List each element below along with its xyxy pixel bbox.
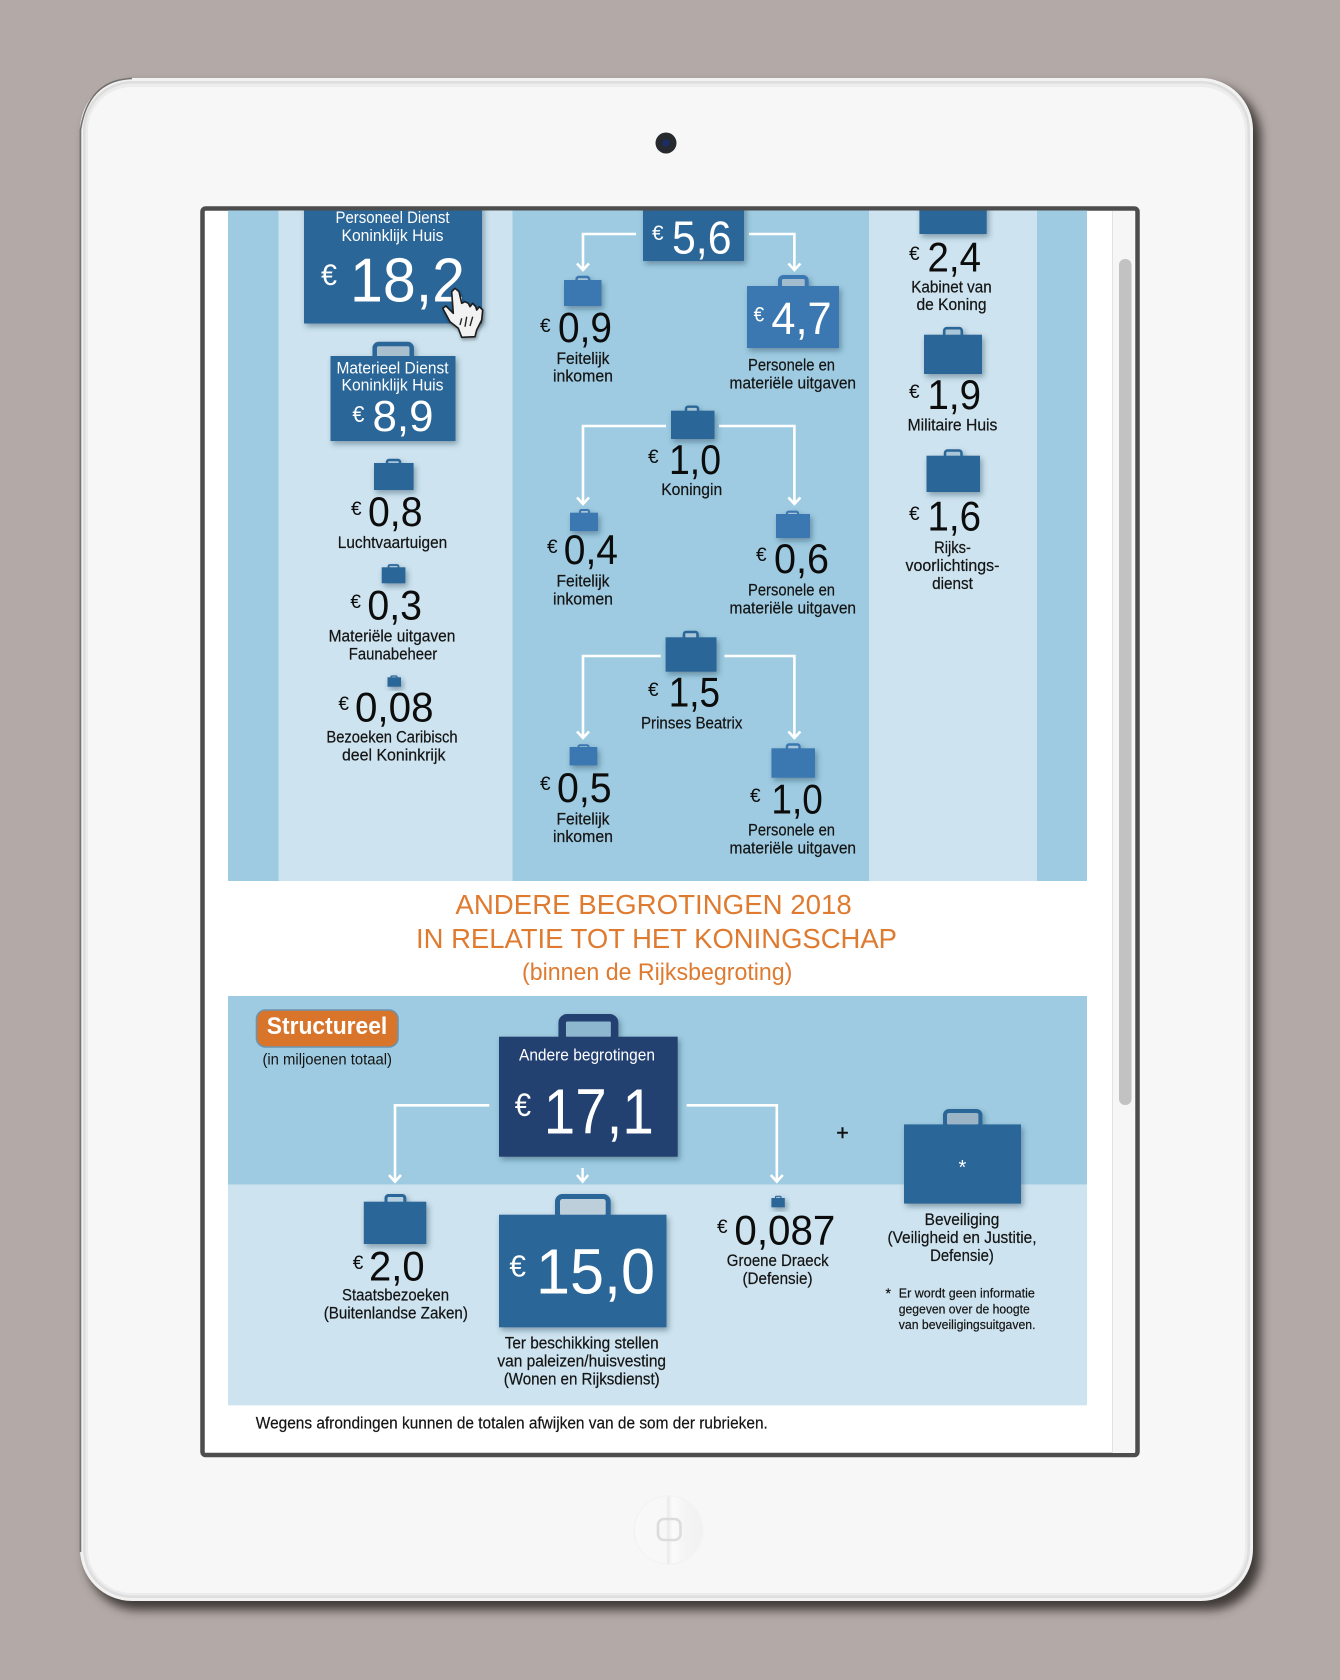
bag: paleizen huisvesting 15,0	[497, 1196, 666, 1388]
bag: Andere begrotingen 17,1: Andere begrotingen	[519, 1046, 655, 1065]
bag: Beveiliging: (Veiligheid en Justitie,	[888, 1228, 1036, 1247]
item: Koningin feitelijk inkomen 0,4: €	[547, 537, 558, 558]
item: Materiele uitgaven Faunabeheer 0,3: €	[350, 592, 361, 613]
item: Staatsbezoeken 2,0: (Buitenlandse Zaken)	[324, 1303, 468, 1322]
bag: Materieel Dienst 8,9: €	[352, 401, 365, 427]
item: Rijksvoorlichtingsdienst 1,6: 1,6	[928, 493, 981, 540]
panel: column background upper	[228, 205, 1087, 881]
item: Bezoeken Caribisch deel Koninkrijk 0,08: deel Koninkrijk	[342, 746, 446, 765]
text: footnote: gegeven over de hoogte	[899, 1302, 1030, 1316]
item: Koningin feitelijk inkomen 0,4: 0,4	[564, 526, 618, 573]
item: Materiele uitgaven Faunabeheer 0,3: 0,3	[367, 582, 422, 629]
bag: Beveiliging: *	[959, 1157, 967, 1179]
item: Koning personele en materiele uitgaven 4,7: 4,7	[771, 293, 832, 344]
item: Koningin personele en materiele uitgaven 0,6: materiële uitgaven	[730, 598, 856, 617]
item: Koning feitelijk inkomen 0,9: €	[540, 316, 551, 337]
arrow: Koningin to uitgaven	[719, 426, 800, 504]
item: Koningin personele en materiele uitgaven 0,6: €	[756, 545, 767, 566]
item: Prinses Beatrix 1,5	[641, 632, 743, 732]
item: Militaire Huis 1,9	[908, 328, 997, 435]
bag: Materieel Dienst 8,9	[330, 344, 456, 441]
title: (binnen de Rijksbegroting)	[522, 959, 792, 986]
panel: Koninklijk Huis column	[304, 190, 483, 765]
bag: Koning 5,6	[642, 210, 750, 268]
item: Koningin personele en materiele uitgaven 0,6: 0,6	[774, 535, 829, 582]
bag: paleizen huisvesting 15,0: Ter beschikking stellen	[505, 1333, 659, 1352]
arrow: Koning to inkomen	[577, 234, 636, 270]
bag: paleizen huisvesting 15,0: van paleizen/huisvesting	[497, 1351, 666, 1370]
item: Rijksvoorlichtingsdienst 1,6: dienst	[932, 574, 973, 593]
item: Groene Draeck 0,087: €	[717, 1217, 728, 1238]
arrow: to Groene Draeck	[687, 1105, 783, 1182]
arrow: Prinses Beatrix to uitgaven	[724, 656, 800, 738]
bag: Koning 5,6: €	[652, 222, 664, 245]
item: Koning personele en materiele uitgaven 4,7: materiële uitgaven	[730, 373, 856, 392]
icon: hand cursor	[443, 288, 483, 337]
item: Staatsbezoeken 2,0: €	[353, 1253, 364, 1274]
arrow: to Staatsbezoeken	[389, 1105, 489, 1182]
bag: paleizen huisvesting 15,0: 15,0	[536, 1235, 655, 1307]
item: Koning feitelijk inkomen 0,9	[540, 277, 613, 386]
text: footnote: Er wordt geen informatie	[899, 1286, 1035, 1300]
item: Kabinet van de Koning 2,4: Kabinet van	[911, 277, 992, 296]
badge: Structureel: Structureel	[267, 1013, 387, 1040]
item: Koningin feitelijk inkomen 0,4: inkomen	[553, 589, 613, 608]
title	[416, 889, 897, 986]
item: Prinses Beatrix 1,5: Prinses Beatrix	[641, 713, 743, 732]
text: footnote	[886, 1285, 1036, 1332]
item: Materiele uitgaven Faunabeheer 0,3: Materiële uitgaven	[329, 627, 455, 646]
item: Koningin personele en materiele uitgaven 0,6	[730, 512, 856, 617]
item: Kabinet van de Koning 2,4: €	[909, 244, 920, 265]
item: Koningin 1,0	[648, 407, 722, 499]
bag: paleizen huisvesting 15,0: (Wonen en Rijksdienst)	[504, 1369, 660, 1388]
item: Bezoeken Caribisch deel Koninkrijk 0,08: €	[338, 694, 349, 715]
badge: Structureel	[256, 1010, 398, 1047]
arrow: Prinses Beatrix to inkomen	[577, 656, 661, 738]
text: footnote: van beveiligingsuitgaven.	[899, 1317, 1036, 1332]
item: Luchtvaartuigen 0,8: 0,8	[368, 488, 422, 535]
item: Groene Draeck 0,087	[717, 1196, 835, 1288]
item: Bezoeken Caribisch deel Koninkrijk 0,08: Bezoeken Caribisch	[326, 728, 458, 747]
title: IN RELATIE TOT HET KONINGSCHAP	[416, 923, 897, 954]
item: Bezoeken Caribisch deel Koninkrijk 0,08	[326, 676, 458, 765]
item: Staatsbezoeken 2,0	[324, 1196, 468, 1322]
text: plus: +	[836, 1122, 849, 1145]
item: Luchtvaartuigen 0,8: €	[351, 499, 362, 520]
bag: Beveiliging: Defensie)	[930, 1246, 994, 1265]
item: Bezoeken Caribisch deel Koninkrijk 0,08: 0,08	[355, 683, 434, 730]
bag: Andere begrotingen 17,1: 17,1	[544, 1075, 654, 1147]
text: rounding note: Wegens afrondingen kunnen de totalen afwijken van de som der rubrieken.	[256, 1414, 768, 1432]
item: Prinses Beatrix 1,5: 1,5	[669, 668, 720, 716]
icon: home button	[634, 1495, 704, 1565]
bag: paleizen huisvesting 15,0: €	[509, 1249, 526, 1284]
item: Koning personele en materiele uitgaven 4,7: Personele en	[748, 355, 835, 374]
scrollbar	[1119, 259, 1132, 1105]
bag: Beveiliging: Beveiliging	[925, 1210, 999, 1229]
item: Beatrix personele en materiele uitgaven 1,0: Personele en	[748, 820, 835, 839]
item: Luchtvaartuigen 0,8: Luchtvaartuigen	[338, 533, 447, 552]
arrow: Koning to uitgaven	[749, 234, 800, 270]
item: Militaire Huis 1,9: 1,9	[928, 371, 981, 418]
bag: Koning 5,6: Koning	[666, 191, 718, 210]
item: Groene Draeck 0,087: 0,087	[734, 1207, 835, 1254]
item: Koning personele en materiele uitgaven 4,7	[730, 277, 856, 392]
item: Rijksvoorlichtingsdienst 1,6: Rijks-	[934, 538, 971, 557]
item: Beatrix personele en materiele uitgaven 1,0: materiële uitgaven	[730, 838, 856, 857]
item: Kabinet van de Koning 2,4	[909, 210, 992, 314]
item: Koningin 1,0: 1,0	[669, 436, 721, 483]
item: Koningin 1,0: Koningin	[661, 480, 722, 499]
item: Koningin feitelijk inkomen 0,4	[547, 510, 618, 608]
screen frame	[202, 208, 1138, 1455]
item: Beatrix personele en materiele uitgaven 1,0	[730, 744, 856, 857]
item: Beatrix feitelijk inkomen 0,5: inkomen	[553, 827, 613, 846]
screen content	[228, 190, 1087, 1432]
title: ANDERE BEGROTINGEN 2018	[455, 889, 852, 920]
item: Beatrix feitelijk inkomen 0,5	[540, 745, 613, 846]
item: Rijksvoorlichtingsdienst 1,6: voorlichtings-	[906, 556, 999, 575]
item: Koning personele en materiele uitgaven 4,7: €	[754, 304, 764, 327]
item: Beatrix personele en materiele uitgaven 1,0: €	[750, 786, 761, 807]
item: Prinses Beatrix 1,5: €	[648, 680, 659, 701]
icon: camera	[656, 132, 676, 154]
text: in miljoenen totaal: (in miljoenen totaal)	[262, 1052, 392, 1068]
arrow: to paleizen	[577, 1168, 588, 1182]
bag: Personeel Dienst 18,2: Personeel Dienst	[336, 208, 450, 227]
bag: Koning 5,6: 5,6	[672, 211, 732, 263]
item: Groene Draeck 0,087: Groene Draeck	[727, 1251, 829, 1270]
panel: right column	[906, 190, 999, 593]
item: Koningin personele en materiele uitgaven 0,6: Personele en	[748, 581, 835, 600]
item: Beatrix feitelijk inkomen 0,5: €	[540, 774, 551, 795]
text: footnote: *	[886, 1285, 892, 1301]
item: Militaire Huis 1,9: Militaire Huis	[908, 416, 997, 435]
item: Koning feitelijk inkomen 0,9: inkomen	[553, 367, 613, 386]
item: Rijksvoorlichtingsdienst 1,6	[906, 450, 999, 593]
item: Materiele uitgaven Faunabeheer 0,3	[329, 565, 455, 663]
item: Koningin 1,0: €	[648, 447, 659, 468]
bag: Personeel Dienst 18,2	[304, 190, 482, 324]
item: Koning feitelijk inkomen 0,9: Feitelijk	[556, 349, 610, 368]
bag: Personeel Dienst 18,2: €	[321, 259, 337, 292]
arrow: Koningin to inkomen	[577, 426, 666, 504]
item: Rijksvoorlichtingsdienst 1,6: €	[909, 504, 920, 525]
item: Staatsbezoeken 2,0: Staatsbezoeken	[342, 1285, 449, 1304]
bag: Beveiliging	[888, 1111, 1036, 1265]
panel: andere begrotingen	[228, 996, 1087, 1405]
bag: Materieel Dienst 8,9: Koninklijk Huis	[342, 376, 444, 394]
item: Kabinet van de Koning 2,4: de Koning	[916, 295, 986, 314]
item: Kabinet van de Koning 2,4: 2,4	[928, 234, 981, 281]
panel: Koning tree	[540, 190, 856, 857]
bag: Personeel Dienst 18,2: Koninklijk Huis	[342, 226, 444, 245]
item: Luchtvaartuigen 0,8	[338, 460, 447, 552]
item: Staatsbezoeken 2,0: 2,0	[369, 1243, 425, 1290]
bag: Andere begrotingen 17,1	[499, 1018, 678, 1157]
bag: Materieel Dienst 8,9: 8,9	[372, 392, 434, 441]
item: Koning feitelijk inkomen 0,9: 0,9	[558, 304, 612, 352]
item: Beatrix feitelijk inkomen 0,5: Feitelijk	[556, 809, 610, 828]
bag: Andere begrotingen 17,1: €	[515, 1087, 531, 1123]
bag: Materieel Dienst 8,9: Materieel Dienst	[336, 358, 449, 378]
item: Militaire Huis 1,9: €	[909, 382, 920, 403]
item: Beatrix personele en materiele uitgaven 1,0: 1,0	[771, 776, 823, 822]
item: Materiele uitgaven Faunabeheer 0,3: Faunabeheer	[349, 644, 437, 663]
item: Koningin feitelijk inkomen 0,4: Feitelijk	[556, 572, 610, 591]
item: Beatrix feitelijk inkomen 0,5: 0,5	[557, 764, 612, 811]
bag: Personeel Dienst 18,2: 18,2	[350, 246, 465, 316]
item: Groene Draeck 0,087: (Defensie)	[742, 1269, 812, 1288]
